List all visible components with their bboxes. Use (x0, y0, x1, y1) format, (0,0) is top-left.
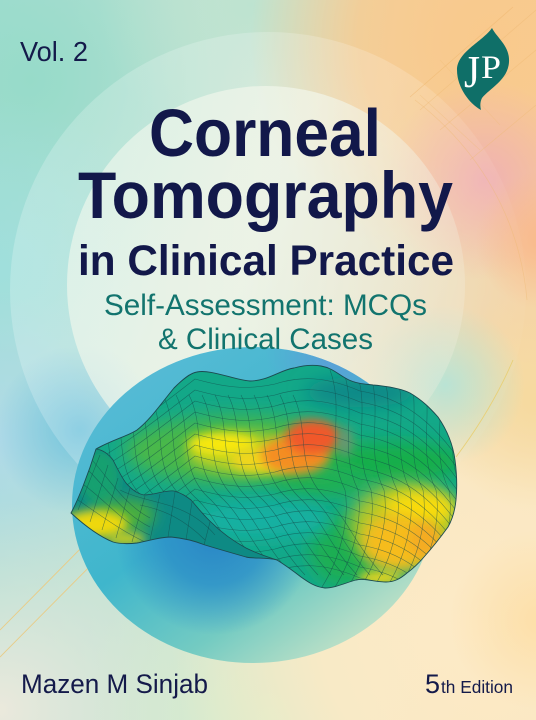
title (78, 96, 454, 285)
folded front face (72, 450, 270, 558)
edition (425, 669, 513, 699)
edition: 5 (425, 669, 440, 699)
volume label: Vol. 2 (20, 36, 88, 67)
publisher logo: JP leaf: J (464, 46, 480, 97)
publisher logo: JP leaf (457, 28, 509, 110)
author: Mazen M Sinjab (21, 669, 208, 699)
inner pale circle (67, 86, 465, 484)
publisher logo: JP leaf: P (481, 50, 501, 86)
surface colours (97, 366, 456, 588)
corneal surface map (70, 364, 458, 588)
title: Tomography (78, 158, 453, 232)
subtitle (104, 289, 427, 356)
fold edge (96, 449, 277, 560)
title: in Clinical Practice (78, 237, 454, 285)
outer translucent ring (10, 32, 526, 548)
blue disc (72, 347, 434, 663)
subtitle: Self-Assessment: MCQs (104, 289, 427, 322)
edition: th Edition (441, 677, 513, 697)
subtitle: & Clinical Cases (158, 323, 373, 356)
mesh lines (97, 370, 456, 588)
title: Corneal (149, 96, 381, 171)
surface outline (71, 365, 457, 588)
